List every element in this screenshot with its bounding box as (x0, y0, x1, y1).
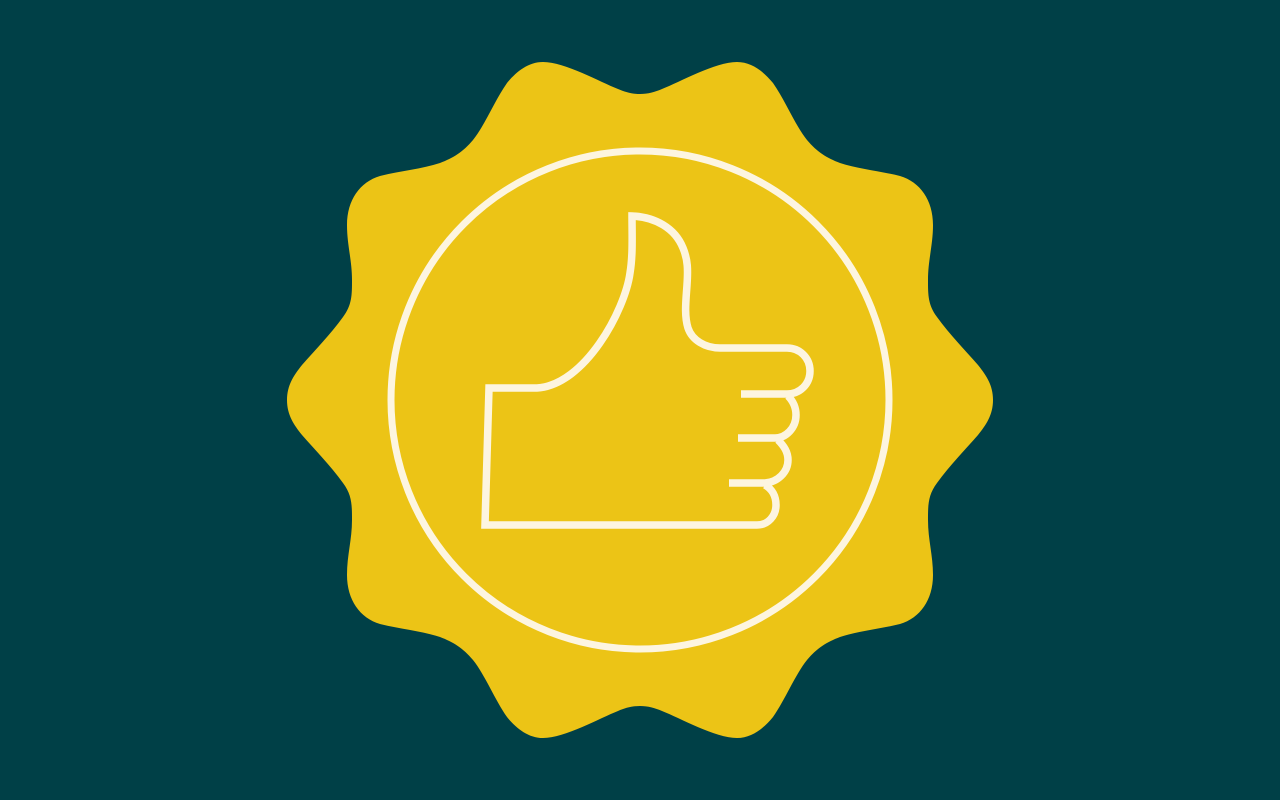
icon: thumbs up outline (485, 216, 810, 525)
icon: wavy yellow seal badge (287, 62, 993, 738)
icon: white circle ring (391, 151, 889, 649)
